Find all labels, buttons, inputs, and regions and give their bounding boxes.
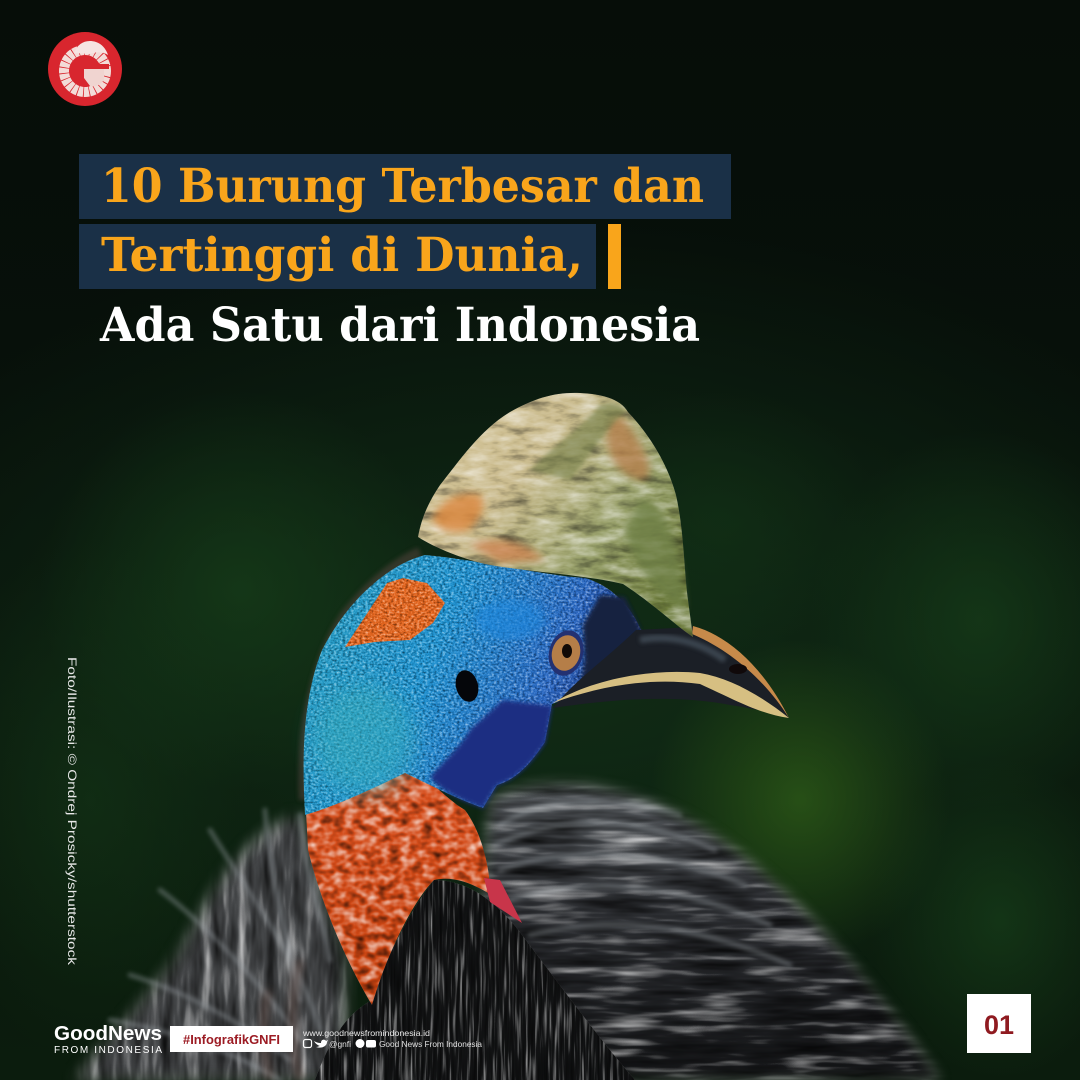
website and social: www.goodnewsfromindonesia.id xyxy=(302,1028,430,1038)
ear hole xyxy=(452,668,482,704)
brand wordmark: GoodNews xyxy=(54,1023,162,1045)
icon: facebook xyxy=(356,1039,364,1048)
brand wordmark xyxy=(54,1023,162,1056)
website and social xyxy=(302,1028,482,1049)
dark blue throat xyxy=(430,700,552,808)
beak xyxy=(553,626,789,718)
footer xyxy=(54,994,1031,1056)
blue head xyxy=(304,555,644,815)
title line 2: Tertinggi di Dunia, xyxy=(101,228,583,283)
hashtag tag: #InfografikGNFI xyxy=(183,1033,280,1047)
body feathers xyxy=(75,784,940,1080)
dark eye mask xyxy=(580,595,640,690)
black neck xyxy=(315,880,635,1080)
accent bar xyxy=(608,224,621,289)
title bar line 2 xyxy=(79,224,596,289)
eye xyxy=(544,626,588,680)
title xyxy=(79,154,731,353)
website and social: @gnfi xyxy=(329,1039,351,1049)
page number: 01 xyxy=(984,1010,1014,1040)
page number xyxy=(967,994,1031,1053)
photo credit: Foto/Ilustrasi: © Ondrej Prosicky/shutterstock xyxy=(65,657,79,966)
photo: cassowary xyxy=(75,393,940,1080)
casque xyxy=(418,393,693,637)
icon: twitter xyxy=(314,1040,328,1048)
title line 3: Ada Satu dari Indonesia xyxy=(99,298,700,353)
logo: GNFI emblem xyxy=(48,32,122,106)
orange crown patch xyxy=(345,578,445,647)
website and social: Good News From Indonesia xyxy=(379,1039,482,1049)
orange wattle xyxy=(306,773,522,1005)
title bar line 1 xyxy=(79,154,731,219)
brand wordmark: FROM INDONESIA xyxy=(54,1045,162,1056)
icon: youtube xyxy=(366,1040,376,1048)
title line 1: 10 Burung Terbesar dan xyxy=(101,159,704,214)
head fuzz xyxy=(303,552,420,800)
hashtag tag xyxy=(170,1026,293,1052)
icon: instagram xyxy=(304,1040,312,1048)
